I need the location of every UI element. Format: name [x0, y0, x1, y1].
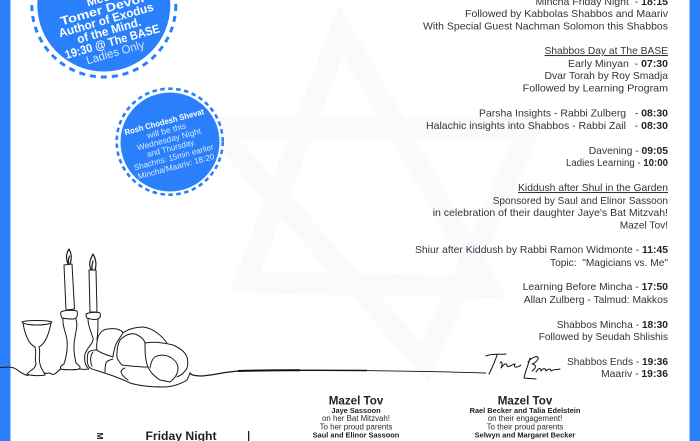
schedule text block: Dvar Torah by Roy Smadja — [544, 70, 668, 82]
schedule text block: Shabbos Mincha - 18:30 — [557, 319, 668, 331]
table line long sweep — [238, 370, 486, 373]
callout: Rosh Chodesh Shevat circle: Rosh Chodesh Shevat — [124, 107, 205, 137]
right blue bar — [690, 0, 700, 441]
schedule text block: Mazel Tov! — [620, 220, 668, 232]
schedule text block: Shabbos Ends - 19:36 — [567, 356, 668, 368]
callout: Rosh Chodesh Shevat circle: Wednesday Night — [136, 126, 203, 152]
schedule text block: Allan Zulberg - Talmud: Makkos — [524, 294, 668, 306]
table line right — [190, 371, 240, 376]
schedule text block: With Special Guest Nachman Solomon this Shabbos — [423, 20, 668, 32]
sidebar: rotated M fragment: M — [95, 432, 105, 440]
Mazel Tov block: Jaye Sassoon — [313, 394, 400, 440]
schedule text block: Shabbos Day at The BASE — [544, 45, 668, 57]
Mazel Tov block: Jaye Sassoon: Saul and Elinor Sassoon — [313, 431, 400, 440]
callout: ladies event circle: 19:30 @ The BASE — [63, 21, 161, 62]
Mazel Tov block: Rael Becker and Talia Edelstein: To their proud parents — [487, 422, 563, 431]
schedule text block: Parsha Insights - Rabbi Zulberg - 08:30 — [479, 108, 668, 120]
left candle — [64, 264, 74, 310]
schedule text block: Kiddush after Shul in the Garden — [518, 182, 668, 194]
schedule text block: Maariv - 19:36 — [601, 368, 668, 380]
schedule text block: Ladies Learning - 10:00 — [566, 157, 668, 169]
Mazel Tov block: Jaye Sassoon: To her proud parents — [320, 422, 392, 431]
cup base to candlestick — [45, 369, 61, 374]
Mazel Tov block: Jaye Sassoon: Mazel Tov — [329, 394, 384, 408]
callout: Rosh Chodesh Shevat circle: Shachris: 15min earlier — [133, 142, 215, 172]
schedule text block: Topic: "Magicians vs. Me" — [550, 257, 668, 269]
schedule text block: Learning Before Mincha - 17:50 — [523, 281, 668, 293]
schedule text block: Halachic insights into Shabbos - Rabbi Zail - 08:30 — [426, 120, 668, 132]
schedule text block: in celebration of their daughter Jaye's Bat Mitzvah! — [433, 207, 668, 219]
signature: The Base — [486, 354, 560, 379]
callout: ladies event circle: Ladies Only — [85, 39, 146, 67]
callout: Rosh Chodesh Shevat circle: will be this — [145, 121, 187, 141]
right candle — [89, 270, 97, 312]
background star of David watermark — [215, 30, 530, 362]
callout: Rosh Chodesh Shevat circle — [117, 89, 223, 195]
schedule text block — [415, 0, 669, 380]
Mazel Tov block: Jaye Sassoon: Jaye Sassoon — [331, 406, 381, 415]
schedule text block: Followed by Learning Program — [523, 82, 668, 94]
challah bread — [97, 329, 123, 357]
left candlestick — [61, 310, 77, 319]
Mazel Tov block: Rael Becker and Talia Edelstein: Selwyn and Margaret Becker — [475, 431, 575, 440]
schedule text block: Followed by Kabbolas Shabbos and Maariv — [465, 8, 669, 20]
Mazel Tov block: Rael Becker and Talia Edelstein — [470, 394, 581, 440]
callout: Rosh Chodesh Shevat circle: Mincha/Maariv: 18:20 — [137, 152, 216, 181]
Mazel Tov block: Rael Becker and Talia Edelstein: Mazel Tov — [498, 394, 553, 408]
schedule text block: Early Minyan - 07:30 — [568, 58, 668, 70]
illustration: kiddush cup, candles and challah line drawing — [0, 249, 240, 387]
schedule text block: Followed by Seudah Shlishis — [539, 331, 668, 343]
Mazel Tov block: Rael Becker and Talia Edelstein: Rael Becker and Talia Edelstein — [470, 406, 581, 415]
callout: ladies event circle — [32, 0, 176, 77]
schedule text block: Davening - 09:05 — [589, 145, 668, 157]
callout: Rosh Chodesh Shevat circle: and Thursday. — [146, 137, 197, 159]
schedule text block: Sponsored by Saul and Elinor Sassoon — [493, 195, 668, 207]
callout: ladies event circle: Author of Exodus — [57, 0, 155, 40]
schedule text block: Shiur after Kiddush by Rabbi Ramon Widmonte - 11:45 — [415, 244, 668, 256]
kiddush cup — [22, 320, 52, 376]
table line left — [0, 367, 28, 376]
callout: ladies event circle: of the Mind. — [75, 15, 143, 46]
Mazel Tov block: Rael Becker and Talia Edelstein: on their engagement! — [488, 414, 562, 423]
right candlestick — [86, 312, 100, 319]
vertical divider mark — [248, 431, 249, 441]
left blue bar — [0, 0, 11, 441]
Mazel Tov block: Jaye Sassoon: on her Bat Mitzvah! — [322, 414, 390, 423]
